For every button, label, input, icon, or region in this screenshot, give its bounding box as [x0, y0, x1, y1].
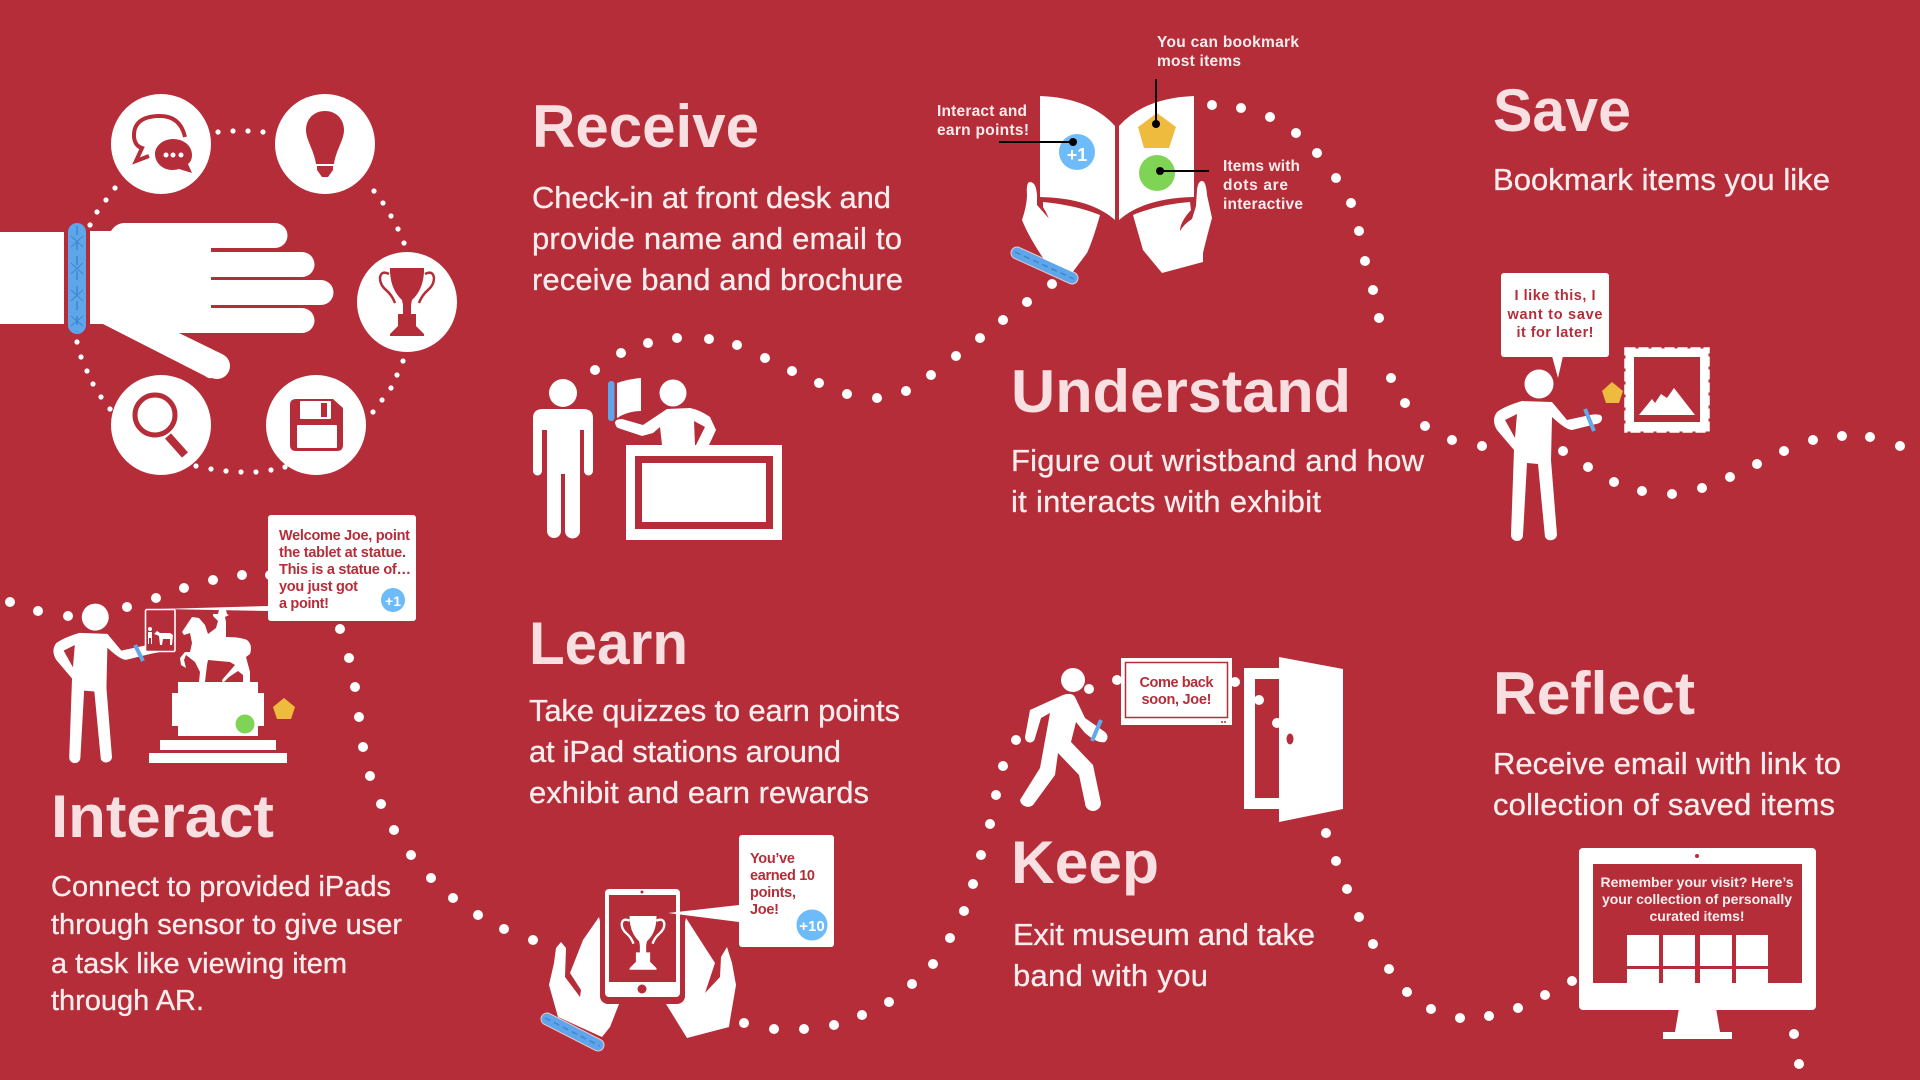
interactive green dot [1139, 155, 1175, 191]
bookmark pentagon [273, 698, 295, 719]
annotation: dots leader: Items with [1223, 158, 1300, 175]
annotation: dots leader: interactive [1223, 196, 1303, 213]
icon: hands holding brochure [937, 34, 1303, 279]
section: Reflect [1493, 660, 1841, 1039]
annotation: bookmark leader: You can bookmark [1157, 34, 1299, 51]
text: Interact description: through AR. [51, 985, 204, 1017]
annotation: points leader [937, 103, 1077, 146]
heading: Understand: Understand [1011, 358, 1351, 425]
text: Keep description [1013, 917, 1315, 993]
text: Interact description: Connect to provided iPads [51, 871, 391, 903]
sign: come back soon [1121, 658, 1232, 725]
speech bubble: earned points: +10 [799, 918, 825, 935]
icon: chat bubbles [111, 94, 211, 194]
speech bubble: welcome: This is a statue of… [279, 562, 411, 578]
speech bubble: earned points: points, [750, 885, 796, 901]
icon: light bulb [275, 94, 375, 194]
text: Learn description: at iPad stations around [529, 734, 841, 769]
text: Interact description: through sensor to give user [51, 909, 402, 941]
text: Interact description: a task like viewing item [51, 948, 347, 980]
section: Learn [529, 610, 900, 1046]
text: Keep description: band with you [1013, 958, 1208, 993]
text: Receive description: Check-in at front desk and [532, 180, 891, 215]
section: Keep [1011, 657, 1343, 993]
icon: desktop monitor: your collection of personally [1602, 891, 1792, 907]
interactive green dot [236, 714, 254, 734]
speech bubble: save [1501, 273, 1609, 378]
band and brochure [608, 378, 641, 421]
speech bubble: earned points: earned 10 [750, 868, 815, 884]
bookmark pentagon [1138, 113, 1176, 148]
icon: framed picture [1626, 348, 1708, 432]
icon: person with tablet [53, 604, 175, 763]
icon: floppy disk [266, 375, 366, 475]
annotation: bookmark leader: most items [1157, 53, 1241, 70]
section: Interact [51, 515, 416, 1017]
hands [549, 917, 736, 1038]
wristband [1015, 252, 1074, 279]
text: Understand description: it interacts with exhibit [1011, 484, 1321, 519]
icon: open door [1244, 657, 1343, 822]
speech bubble: save: want to save [1506, 307, 1602, 323]
icon: visitor at front desk [533, 378, 782, 540]
speech bubble: welcome: you just got [279, 579, 358, 595]
annotation: dots leader: dots are [1223, 177, 1288, 194]
speech bubble: welcome: +1 [385, 593, 401, 609]
icon: hands holding tablet [545, 884, 736, 1046]
icon: equestrian statue [149, 610, 287, 763]
text: Save description: Bookmark items you like [1493, 162, 1830, 197]
icon: desktop monitor: Remember your visit? Here’s [1600, 874, 1794, 890]
text: Receive description: provide name and email to [532, 221, 902, 256]
speech bubble: welcome: a point! [279, 596, 329, 612]
heading: Receive: Receive [532, 93, 759, 160]
speech bubble: earned points [668, 835, 834, 947]
icon: desktop monitor [1579, 848, 1816, 1039]
heading: Interact: Interact [51, 783, 274, 850]
icon: person with wristband [1494, 370, 1602, 541]
tablet [600, 884, 685, 1004]
points badge [1059, 134, 1095, 170]
heading: Reflect: Reflect [1493, 660, 1695, 727]
text: Receive description: receive band and brochure [532, 262, 903, 297]
icon: magnifying glass [111, 375, 211, 475]
icon: walking person [1020, 668, 1108, 811]
sign: come back soon: soon, Joe! [1142, 692, 1212, 708]
speech bubble: earned points: You’ve [750, 851, 795, 867]
text: Learn description [529, 693, 900, 810]
icon: trophy [357, 252, 457, 352]
text: Keep description: Exit museum and take [1013, 917, 1315, 952]
points badge: +1 [1067, 145, 1087, 165]
brochure pages [1040, 96, 1194, 220]
text: Reflect description [1493, 746, 1841, 822]
hand wearing wristband [0, 223, 334, 379]
text: Understand description: Figure out wristband and how [1011, 443, 1425, 478]
section: Understand [937, 34, 1425, 519]
hands [1022, 181, 1212, 273]
sign: come back soon: Come back [1140, 675, 1214, 691]
clerk and desk [615, 380, 782, 540]
text: Reflect description: Receive email with link to [1493, 746, 1841, 781]
text: Learn description: Take quizzes to earn points [529, 693, 900, 728]
annotation: points leader: Interact and [937, 103, 1027, 120]
section: Receive [532, 93, 903, 540]
text: Learn description: exhibit and earn rewards [529, 775, 869, 810]
annotation: dots leader [1156, 158, 1303, 213]
speech bubble: save: it for later! [1516, 325, 1594, 341]
speech bubble: welcome: the tablet at statue. [279, 545, 406, 561]
wristband [545, 1018, 600, 1046]
text: Interact description [51, 871, 402, 1017]
annotation: bookmark leader [1152, 34, 1299, 128]
annotation: points leader: earn points! [937, 122, 1029, 139]
visitor figure [533, 379, 593, 538]
ring dots [74, 128, 407, 475]
speech bubble: save: I like this, I [1514, 288, 1596, 304]
text: Reflect description: collection of saved items [1493, 787, 1835, 822]
section: Save [1493, 77, 1830, 541]
text: Understand description [1011, 443, 1425, 519]
wristband feature ring [0, 94, 457, 475]
text: Receive description [532, 180, 903, 297]
heading: Save: Save [1493, 77, 1631, 144]
icon: desktop monitor: curated items! [1650, 908, 1744, 924]
saved item tiles [1627, 935, 1768, 983]
speech bubble: welcome: Welcome Joe, point [279, 528, 410, 544]
speech bubble: earned points: Joe! [750, 902, 779, 918]
speech bubble: welcome [160, 515, 416, 621]
heading: Keep: Keep [1011, 829, 1159, 896]
heading: Learn: Learn [529, 610, 688, 677]
bookmark pentagon [1602, 382, 1623, 403]
